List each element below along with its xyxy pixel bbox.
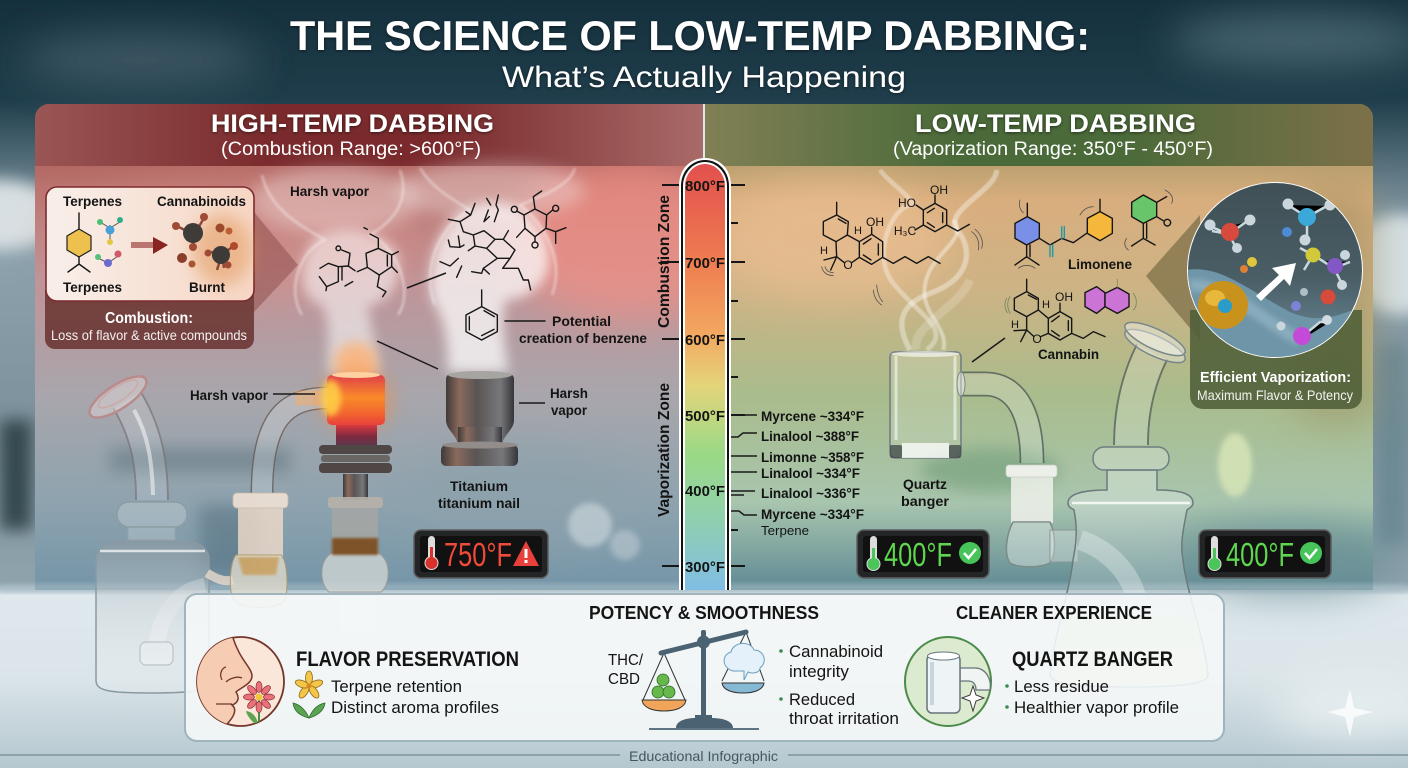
combustion diagram box: Terpenes	[63, 279, 122, 295]
thermometer scale labels: 600°F	[685, 332, 725, 349]
heading band: low-temp dabbing: LOW-TEMP DABBING	[915, 110, 1196, 138]
thermometer scale labels: 400°F	[685, 483, 725, 500]
terpene boiling point labels	[731, 408, 864, 538]
molecule: cannabin: Cannabin	[1038, 346, 1099, 362]
label: harsh vapor right	[519, 385, 588, 418]
text: flavor preservation: FLAVOR PRESERVATION	[296, 648, 519, 671]
heading band: high-temp dabbing	[35, 104, 703, 166]
terpene boiling point labels: Linalool ~334°F	[761, 465, 860, 481]
terpene boiling point labels: Terpene	[761, 523, 809, 538]
bottom panel: benefits	[185, 594, 1224, 741]
molecule: cannabin: H	[1011, 319, 1019, 331]
molecules: terpenes with colored rings	[1015, 190, 1173, 268]
heading: page title: THE SCIENCE OF LOW-TEMP DABBING:	[290, 12, 1090, 59]
text: flavor preservation: Terpene retention	[331, 677, 462, 696]
panel: low-temp dabbing background	[704, 104, 1400, 595]
heading band: low-temp dabbing	[705, 104, 1373, 166]
terpene boiling point labels: Limonne ~358°F	[761, 449, 864, 465]
thermometer scale labels	[685, 178, 725, 576]
panel: high-temp dabbing background	[35, 104, 750, 590]
icon: quartz banger	[905, 637, 991, 726]
temperature display: 400F: 400°F	[884, 536, 952, 573]
heading: cleaner experience: CLEANER EXPERIENCE	[956, 603, 1152, 623]
center divider	[703, 104, 705, 160]
terpene boiling point labels: Linalool ~388°F	[761, 428, 859, 444]
label: harsh vapor left	[190, 387, 315, 403]
combustion diagram box	[46, 187, 254, 301]
heading: potency and smoothness: POTENCY & SMOOTHNESS	[589, 603, 819, 623]
text: quartz banger: Less residue	[1014, 677, 1109, 696]
molecule: cannabin	[1005, 279, 1136, 362]
molecule: CBD: HO	[898, 196, 916, 210]
thermometer ticks	[662, 185, 745, 566]
label: harsh vapor top: Harsh vapor	[290, 183, 370, 199]
molecule fragments: in smoke left	[319, 228, 398, 297]
icon: balance scale	[608, 630, 764, 729]
caption box: Maximum Flavor & Potency	[1197, 387, 1353, 403]
combustion caption: Combustion:	[105, 310, 193, 327]
temperature display: 750F	[414, 530, 548, 578]
molecule fragments: in smoke right	[440, 191, 566, 290]
text: flavor preservation	[293, 648, 519, 718]
smoke plumes: high-temp	[250, 162, 585, 382]
label: titanium nail: Titanium	[450, 478, 508, 494]
terpene boiling point labels: Myrcene ~334°F	[761, 408, 864, 424]
molecule: THC: H	[820, 245, 828, 257]
quartz banger glass	[890, 351, 1078, 567]
molecule: cannabin: O	[1032, 332, 1042, 346]
molecule: THC	[820, 202, 940, 305]
heading: page title	[290, 12, 1090, 94]
temperature display: 400F right: 400°F	[1226, 536, 1294, 573]
icon: balance scale: THC/	[608, 652, 644, 669]
label: quartz banger	[901, 476, 950, 509]
caption box	[1190, 310, 1362, 409]
molecule: THC: O	[843, 258, 853, 272]
benzene molecule with label	[466, 290, 647, 346]
glass bent arm and joint	[230, 398, 327, 608]
molecule: CBD	[894, 183, 982, 250]
molecule: cannabin: H	[1042, 299, 1050, 311]
titanium nail icon	[441, 371, 518, 466]
label: titanium nail	[438, 478, 520, 511]
icon: balance scale: CBD	[608, 671, 640, 688]
text: quartz banger: QUARTZ BANGER	[1012, 648, 1173, 671]
heading: page title: What’s Actually Happening	[502, 61, 906, 94]
text: potency bullets: throat irritation	[789, 709, 899, 728]
left rig glass	[84, 369, 233, 693]
zone labels: Vaporization Zone	[656, 383, 673, 517]
label: quartz banger: Quartz	[903, 476, 947, 492]
label: harsh vapor right: vapor	[551, 402, 588, 418]
text: quartz banger: Healthier vapor profile	[1014, 698, 1179, 717]
icon: nose and flower	[190, 637, 284, 730]
smoke: low-temp wisps	[880, 170, 997, 350]
label: harsh vapor left: Harsh vapor	[190, 387, 269, 403]
molecule: CBD: OH	[930, 183, 948, 197]
label: harsh vapor right: Harsh	[550, 385, 588, 401]
molecule: CBD: H₃C	[894, 224, 916, 238]
molecule: THC: H	[854, 225, 862, 237]
leader lines	[377, 273, 446, 369]
zone labels	[656, 195, 673, 517]
text: potency bullets: integrity	[789, 662, 849, 681]
text: potency bullets: Cannabinoid	[789, 642, 883, 661]
thermometer scale labels: 700°F	[685, 255, 725, 272]
benzene molecule with label: Potential	[552, 313, 611, 329]
terpene boiling point labels: Myrcene ~334°F	[761, 506, 864, 522]
benzene molecule with label: creation of benzene	[519, 330, 647, 346]
label: titanium nail: titanium nail	[438, 495, 520, 511]
magnified molecule circle	[1185, 180, 1365, 365]
combustion diagram box: Burnt	[189, 279, 225, 295]
heading band: high-temp dabbing: (Combustion Range: >600°F)	[221, 139, 481, 160]
heated titanium nail	[318, 366, 394, 637]
right rig glass	[1050, 316, 1208, 687]
temperature display: 750F: 750°F	[444, 536, 512, 573]
text: flavor preservation: Distinct aroma profiles	[331, 698, 499, 717]
combustion caption	[45, 290, 254, 349]
molecule: THC: OH	[866, 215, 884, 229]
callout: combustion	[45, 187, 298, 349]
caption box: Efficient Vaporization:	[1200, 369, 1351, 386]
zone labels: Combustion Zone	[656, 195, 673, 328]
molecule: cannabin: OH	[1055, 290, 1073, 304]
text: quartz banger	[1005, 648, 1179, 717]
thermometer scale labels: 800°F	[685, 178, 725, 195]
temperature display: 400F right	[1199, 530, 1331, 578]
combustion caption: Loss of flavor & active compounds	[51, 327, 247, 343]
label: quartz banger: banger	[901, 493, 950, 509]
label: limonene: Limonene	[1068, 256, 1132, 272]
text: potency bullets	[779, 642, 899, 728]
temperature display: 400F	[857, 530, 989, 578]
text: potency bullets: Reduced	[789, 690, 855, 709]
combustion diagram box: Cannabinoids	[157, 193, 246, 209]
thermometer scale labels: 300°F	[685, 559, 725, 576]
combustion diagram box: Terpenes	[63, 193, 122, 209]
heading band: high-temp dabbing: HIGH-TEMP DABBING	[211, 110, 494, 138]
leader line: banger	[972, 338, 1005, 362]
heading band: low-temp dabbing: (Vaporization Range: 350°F - 450°F)	[893, 139, 1213, 160]
terpene boiling point labels: Linalool ~336°F	[761, 485, 860, 501]
callout: efficient vaporization	[1146, 180, 1365, 409]
thermometer scale labels: 500°F	[685, 408, 725, 425]
table edge	[0, 584, 1408, 592]
thermometer	[662, 158, 745, 590]
footer: educational infographic: Educational Infographic	[629, 748, 778, 764]
